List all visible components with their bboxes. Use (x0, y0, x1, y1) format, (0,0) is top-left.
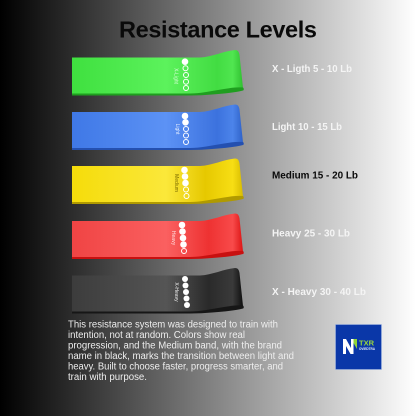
title: Resistance Levels (119, 16, 317, 42)
description paragraph: intention, not at random. Colors show real (68, 330, 245, 341)
logo: TXR Oviedtra (336, 324, 382, 370)
level dots (179, 222, 186, 254)
band: Heavy red (72, 214, 244, 259)
band: X-Light green (72, 50, 244, 96)
band: Light blue (72, 104, 244, 150)
logo wordmark: TXR (359, 338, 375, 348)
level dots (182, 59, 188, 90)
level dots (182, 113, 188, 144)
logo mark (343, 339, 354, 354)
description paragraph: progression, and the Medium band, with the brand (68, 340, 282, 352)
band label: X-Heavy (173, 282, 179, 302)
description paragraph (68, 320, 294, 383)
band label: Light (174, 124, 180, 135)
label: X-Light range: X - Ligth 5 - 10 Lb (272, 64, 352, 75)
band label: Medium (173, 174, 179, 192)
label: X-Heavy range: X - Heavy 30 - 40 Lb (272, 287, 366, 298)
band label: Heavy (170, 231, 176, 246)
label: Light range: Light 10 - 15 Lb (272, 122, 342, 133)
band: Medium yellow (72, 158, 244, 204)
label: Medium range: Medium 15 - 20 Lb (272, 170, 358, 182)
level dots (182, 167, 189, 198)
logo sub-wordmark: OVIEDTRA (359, 347, 375, 351)
description paragraph: heavy. Built to choose faster, progress smarter, and (68, 362, 283, 372)
band label: X-Light (172, 68, 178, 85)
description paragraph: name in black, marks the transition between light and (68, 351, 294, 362)
band: X-Heavy black (72, 268, 244, 314)
label: Heavy range: Heavy 25 - 30 Lb (272, 228, 350, 240)
description paragraph: This resistance system was designed to train with (68, 320, 278, 330)
description paragraph: train with purpose. (68, 372, 147, 383)
level dots (182, 276, 190, 308)
